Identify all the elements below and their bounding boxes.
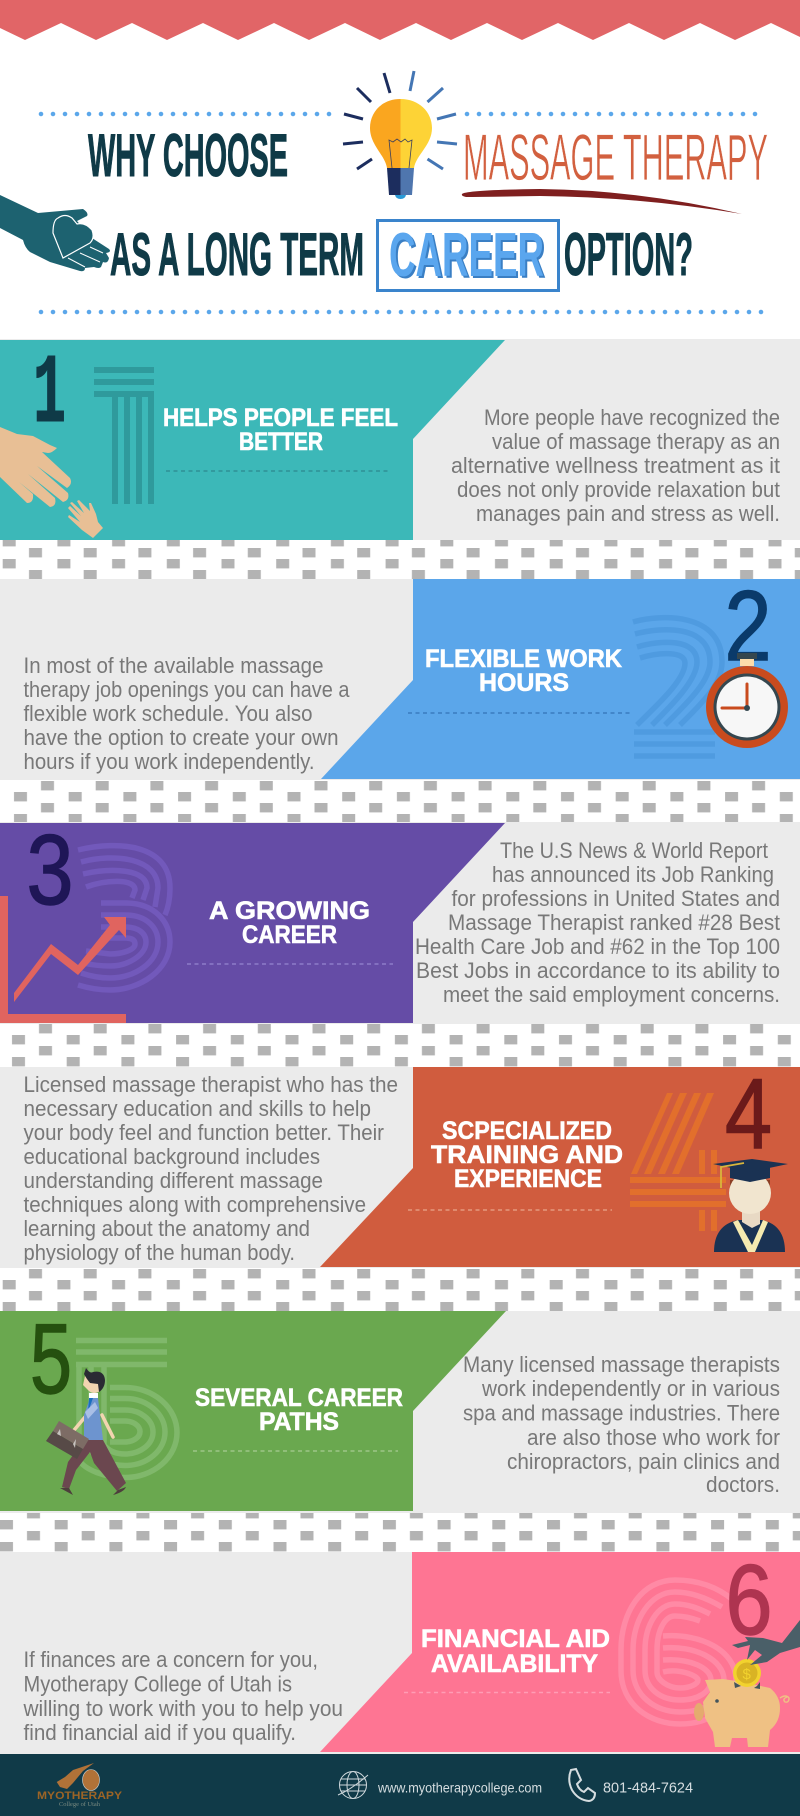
body text 6: Myotherapy College of Utah is	[24, 1672, 292, 1696]
heading 1: BETTER	[239, 428, 323, 456]
career box: CAREER	[391, 223, 546, 292]
panel 3: a growing career	[0, 814, 800, 1024]
body text 4: physiology of the human body.	[24, 1240, 295, 1265]
body text 4: techniques along with comprehensive	[24, 1192, 366, 1217]
body text 5: doctors.	[706, 1472, 780, 1497]
ghost numeral 4	[630, 1093, 726, 1231]
body text 1: alternative wellness treatment as it	[451, 453, 780, 478]
panel 2: flexible work hours	[0, 570, 800, 780]
body text 5: Many licensed massage therapists	[463, 1352, 780, 1377]
body text 6	[23, 1647, 343, 1745]
body text 5: spa and massage industries. There	[463, 1400, 780, 1426]
panel 5: several career paths	[0, 1303, 800, 1513]
phone number: 801-484-7624	[603, 1780, 693, 1796]
body text 3: Health Care Job and #62 in the Top 100	[415, 934, 780, 959]
heading 4	[431, 1117, 623, 1193]
body text 1: manages pain and stress as well.	[476, 501, 780, 526]
body text 3: meet the said employment concerns.	[443, 982, 780, 1007]
body text 4: Licensed massage therapist who has the	[24, 1072, 398, 1097]
body text 4: educational background includes	[24, 1144, 320, 1169]
body text 6: find financial aid if you qualify.	[24, 1720, 296, 1745]
body text 3: has announced its Job Ranking	[492, 862, 774, 887]
body text 4	[24, 1072, 398, 1265]
ghost numeral 5	[76, 1340, 177, 1478]
body text 5	[463, 1352, 780, 1497]
ghost numeral 3	[78, 846, 170, 990]
title	[88, 120, 768, 292]
title: AS A LONG TERM	[110, 221, 364, 288]
icon: phone	[569, 1769, 595, 1801]
body text 2: have the option to create your own	[24, 725, 338, 750]
body text 2	[24, 653, 350, 774]
heading 2: FLEXIBLE WORK	[425, 645, 622, 673]
number 2: 2	[724, 570, 772, 681]
heading 5	[195, 1384, 403, 1436]
heading 3: CAREER	[242, 921, 337, 949]
icon: hand with coin and piggy bank	[694, 1620, 800, 1747]
body text 6: If finances are a concern for you,	[24, 1647, 318, 1672]
body text 1: value of massage therapy as an	[492, 429, 780, 454]
heading 6	[421, 1625, 610, 1678]
ghost numeral 2	[633, 618, 722, 756]
panel 1: helps people feel better	[0, 339, 800, 540]
body text 3	[415, 838, 780, 1007]
icon: growth chart	[0, 896, 126, 1023]
logo	[37, 1763, 123, 1808]
body text 2: In most of the available massage	[24, 653, 324, 678]
career box	[378, 220, 558, 292]
career box: CAREER	[389, 221, 544, 290]
icon: stopwatch	[706, 653, 788, 748]
number 4: 4	[725, 1058, 772, 1169]
heading 2: HOURS	[479, 669, 569, 697]
heading 2	[425, 645, 622, 697]
heading 4: SCPECIALIZED	[442, 1117, 612, 1145]
logo: College of Utah	[59, 1801, 100, 1808]
body text 1	[451, 405, 780, 526]
logo: MYOTHERAPY	[37, 1790, 123, 1802]
heading 3: A GROWING	[209, 897, 370, 925]
panel 4: specialized training and experience	[0, 1058, 800, 1268]
title underline swoosh	[462, 189, 742, 214]
body text 5: work independently or in various	[481, 1376, 780, 1401]
number 1: 1	[33, 340, 66, 451]
body text 4: your body feel and function better. Their	[24, 1120, 384, 1145]
icon: light bulb	[343, 71, 457, 199]
body text 2: flexible work schedule. You also	[24, 701, 312, 726]
number 5: 5	[30, 1303, 72, 1414]
heading 5: PATHS	[259, 1408, 339, 1436]
heading 4: TRAINING AND	[431, 1141, 623, 1169]
icon: reaching hands	[0, 427, 103, 538]
body text 3: Massage Therapist ranked #28 Best	[448, 910, 780, 935]
body text 3: The U.S News & World Report	[500, 838, 768, 863]
body text 2: hours if you work independently.	[24, 749, 314, 774]
heading 4: EXPERIENCE	[454, 1165, 602, 1193]
heading 6: FINANCIAL AID	[421, 1625, 610, 1653]
icon: graduate	[713, 1159, 788, 1252]
icon: globe	[338, 1772, 368, 1798]
body text 3: Best Jobs in accordance to its ability to	[416, 958, 780, 983]
body text 4: understanding different massage	[24, 1168, 323, 1193]
heading 6: AVAILABILITY	[431, 1650, 598, 1678]
heading 1	[163, 404, 398, 456]
body text 3: for professions in United States and	[452, 886, 780, 911]
body text 5: chiropractors, pain clinics and	[507, 1449, 780, 1474]
title: WHY CHOOSE	[88, 122, 288, 189]
panel 6: financial aid availability	[0, 1544, 800, 1754]
body text 2: therapy job openings you can have a	[24, 677, 350, 702]
body text 1: does not only provide relaxation but	[457, 477, 780, 502]
body text 5: are also those who work for	[527, 1425, 780, 1450]
icon: hand holding heart	[0, 195, 110, 271]
number 6: 6	[726, 1544, 772, 1655]
number 3: 3	[26, 814, 74, 925]
top zigzag banner	[0, 0, 800, 40]
heading 1: HELPS PEOPLE FEEL	[163, 404, 398, 432]
website: www.myotherapycollege.com	[377, 1780, 542, 1796]
body text 4: learning about the anatomy and	[24, 1216, 310, 1241]
body text 6: willing to work with you to help you	[23, 1696, 343, 1721]
heading 3	[209, 897, 370, 949]
footer	[0, 1754, 800, 1816]
icon: hand with coin and piggy bank: $	[742, 1666, 752, 1683]
ghost numeral 6	[621, 1580, 736, 1724]
ghost numeral 1	[94, 367, 154, 504]
icon: walking man with briefcase	[46, 1368, 126, 1495]
heading 5: SEVERAL CAREER	[195, 1384, 403, 1412]
body text 4: necessary education and skills to help	[24, 1096, 371, 1121]
